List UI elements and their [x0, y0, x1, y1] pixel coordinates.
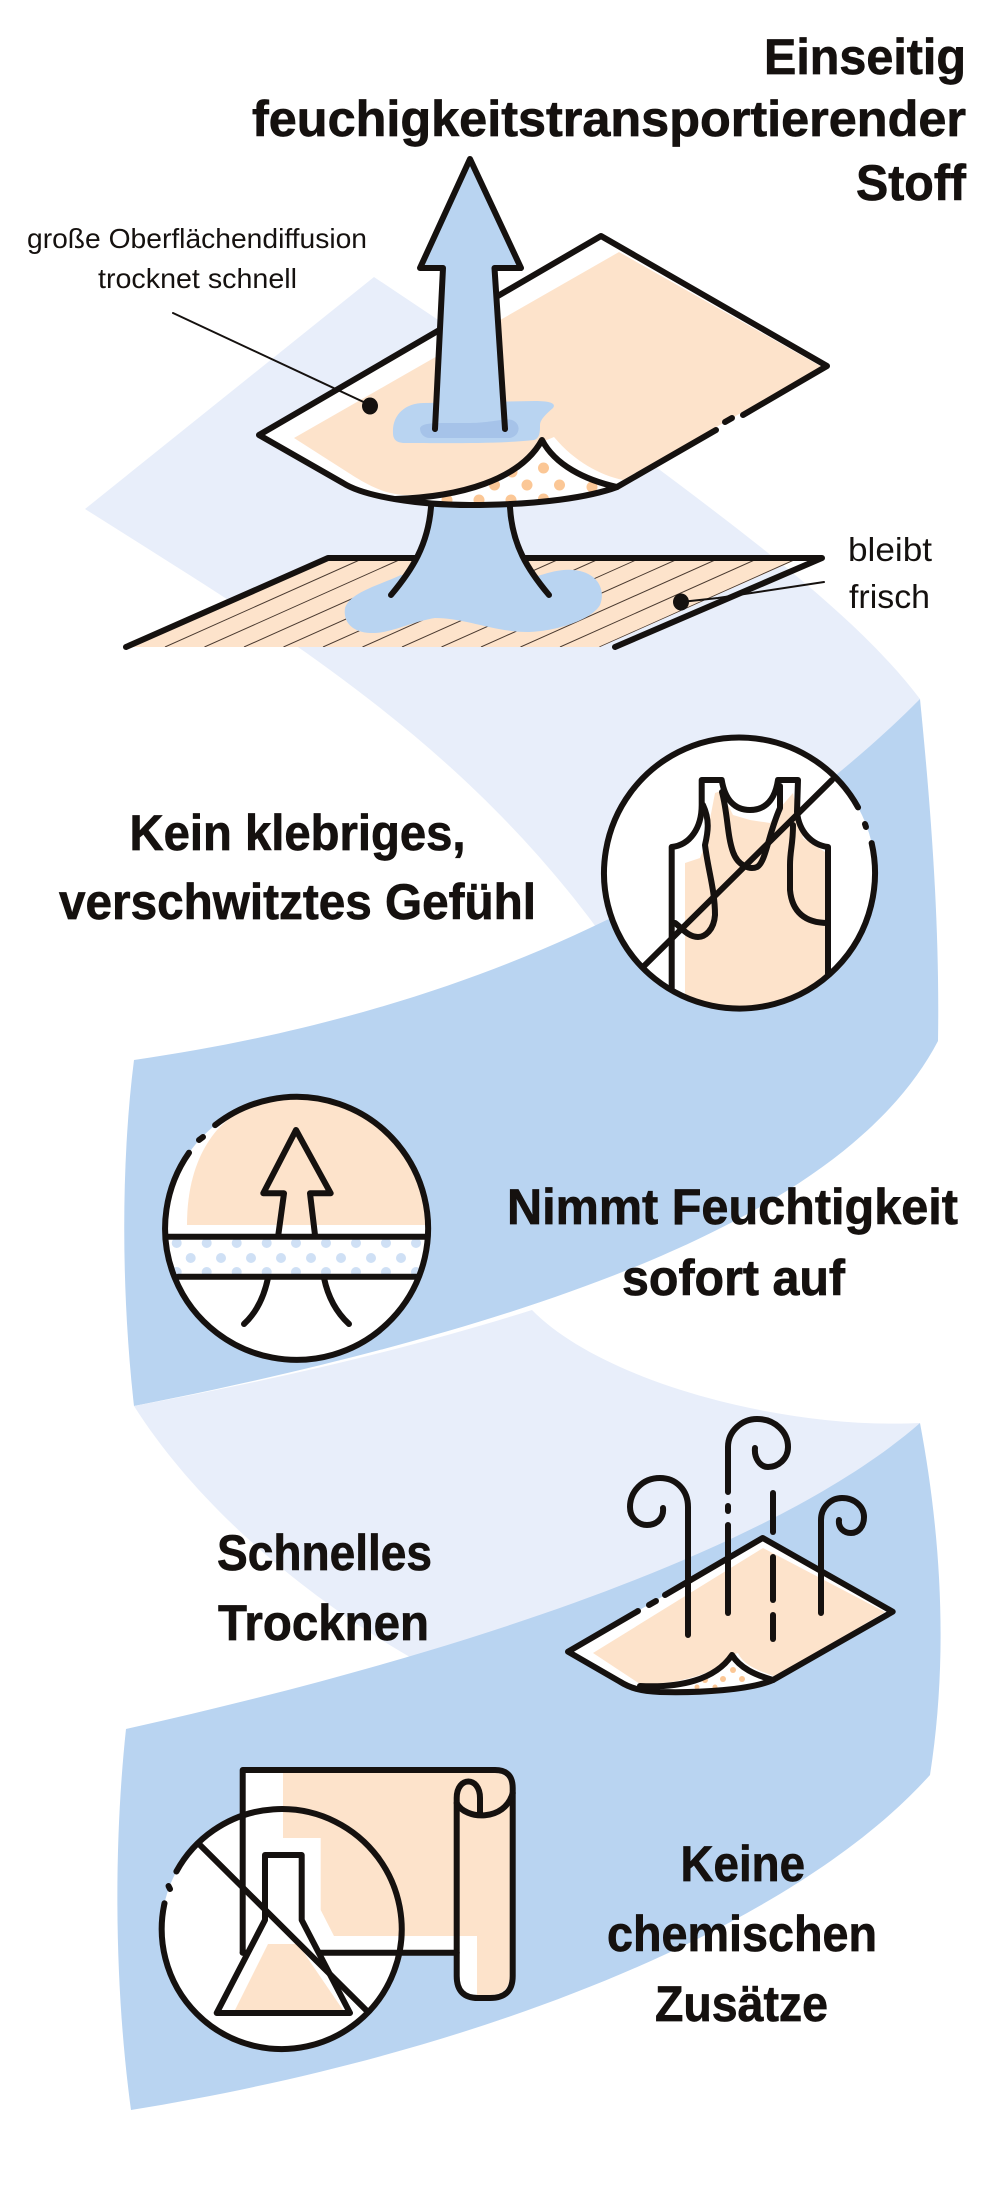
label: stays fresh: bleibt: [848, 531, 932, 568]
upward arrow: [420, 159, 521, 438]
upper fabric sheet: [259, 236, 827, 506]
title: [252, 29, 966, 211]
fabric roll: [243, 1770, 513, 1998]
flask: [217, 1855, 350, 2013]
steam curls: [630, 1419, 864, 1639]
dotted underside: [442, 462, 598, 506]
dotted layer: [172, 1240, 421, 1274]
label: stays fresh: [848, 531, 932, 615]
heading: no chemical additives: Zusätze: [655, 1976, 828, 2032]
label: surface diffusion: trocknet schnell: [98, 263, 297, 294]
icon: absorbing layer with arrow: [165, 1095, 430, 1360]
label: surface diffusion: [27, 223, 367, 294]
label: stays fresh: frisch: [849, 578, 930, 615]
moisture patch on upper fabric: [393, 401, 554, 443]
icon: drying fabric with steam: [568, 1419, 893, 1692]
background ribbon: top light band: [85, 277, 920, 927]
icon: crossed out sweaty tank top: [604, 738, 875, 1012]
heading: fast drying: Schnelles: [217, 1525, 432, 1581]
background ribbon: second dark band: [117, 1423, 941, 2110]
callout line: stays fresh: [673, 582, 824, 610]
heading: fast drying: [217, 1525, 432, 1651]
heading: no sticky feeling: [59, 805, 536, 930]
heading: absorbs moisture immediately: [507, 1179, 958, 1306]
heading: no sticky feeling: verschwitztes Gefühl: [59, 874, 536, 930]
diagram: two layer fabric with moisture transport: [126, 159, 827, 647]
heading: fast drying: Trocknen: [218, 1595, 429, 1651]
background ribbon: second light band: [134, 1310, 920, 1660]
heading: no chemical additives: chemischen: [607, 1906, 877, 1962]
heading: no sticky feeling: Kein klebriges,: [130, 805, 466, 861]
icon: crossed out chemical flask over fabric roll: [162, 1770, 513, 2049]
heading: absorbs moisture immediately: sofort auf: [622, 1250, 845, 1306]
heading: no chemical additives: Keine: [680, 1836, 805, 1892]
moisture stem between the layers: [391, 505, 549, 595]
title: Einseitig: [764, 29, 966, 85]
moisture puddle on lower fabric: [345, 570, 602, 633]
background ribbon: first dark band: [124, 699, 938, 1406]
lower fabric with hatch: [126, 558, 822, 647]
title: Stoff: [856, 155, 966, 211]
label: surface diffusion: große Oberflächendiffusion: [27, 223, 367, 254]
callout line: surface diffusion: [173, 313, 378, 414]
heading: absorbs moisture immediately: Nimmt Feuchtigkeit: [507, 1179, 958, 1235]
title: feuchigkeitstransportierender: [252, 91, 966, 147]
heading: no chemical additives: [607, 1836, 877, 2032]
underside dots: [694, 1667, 745, 1690]
